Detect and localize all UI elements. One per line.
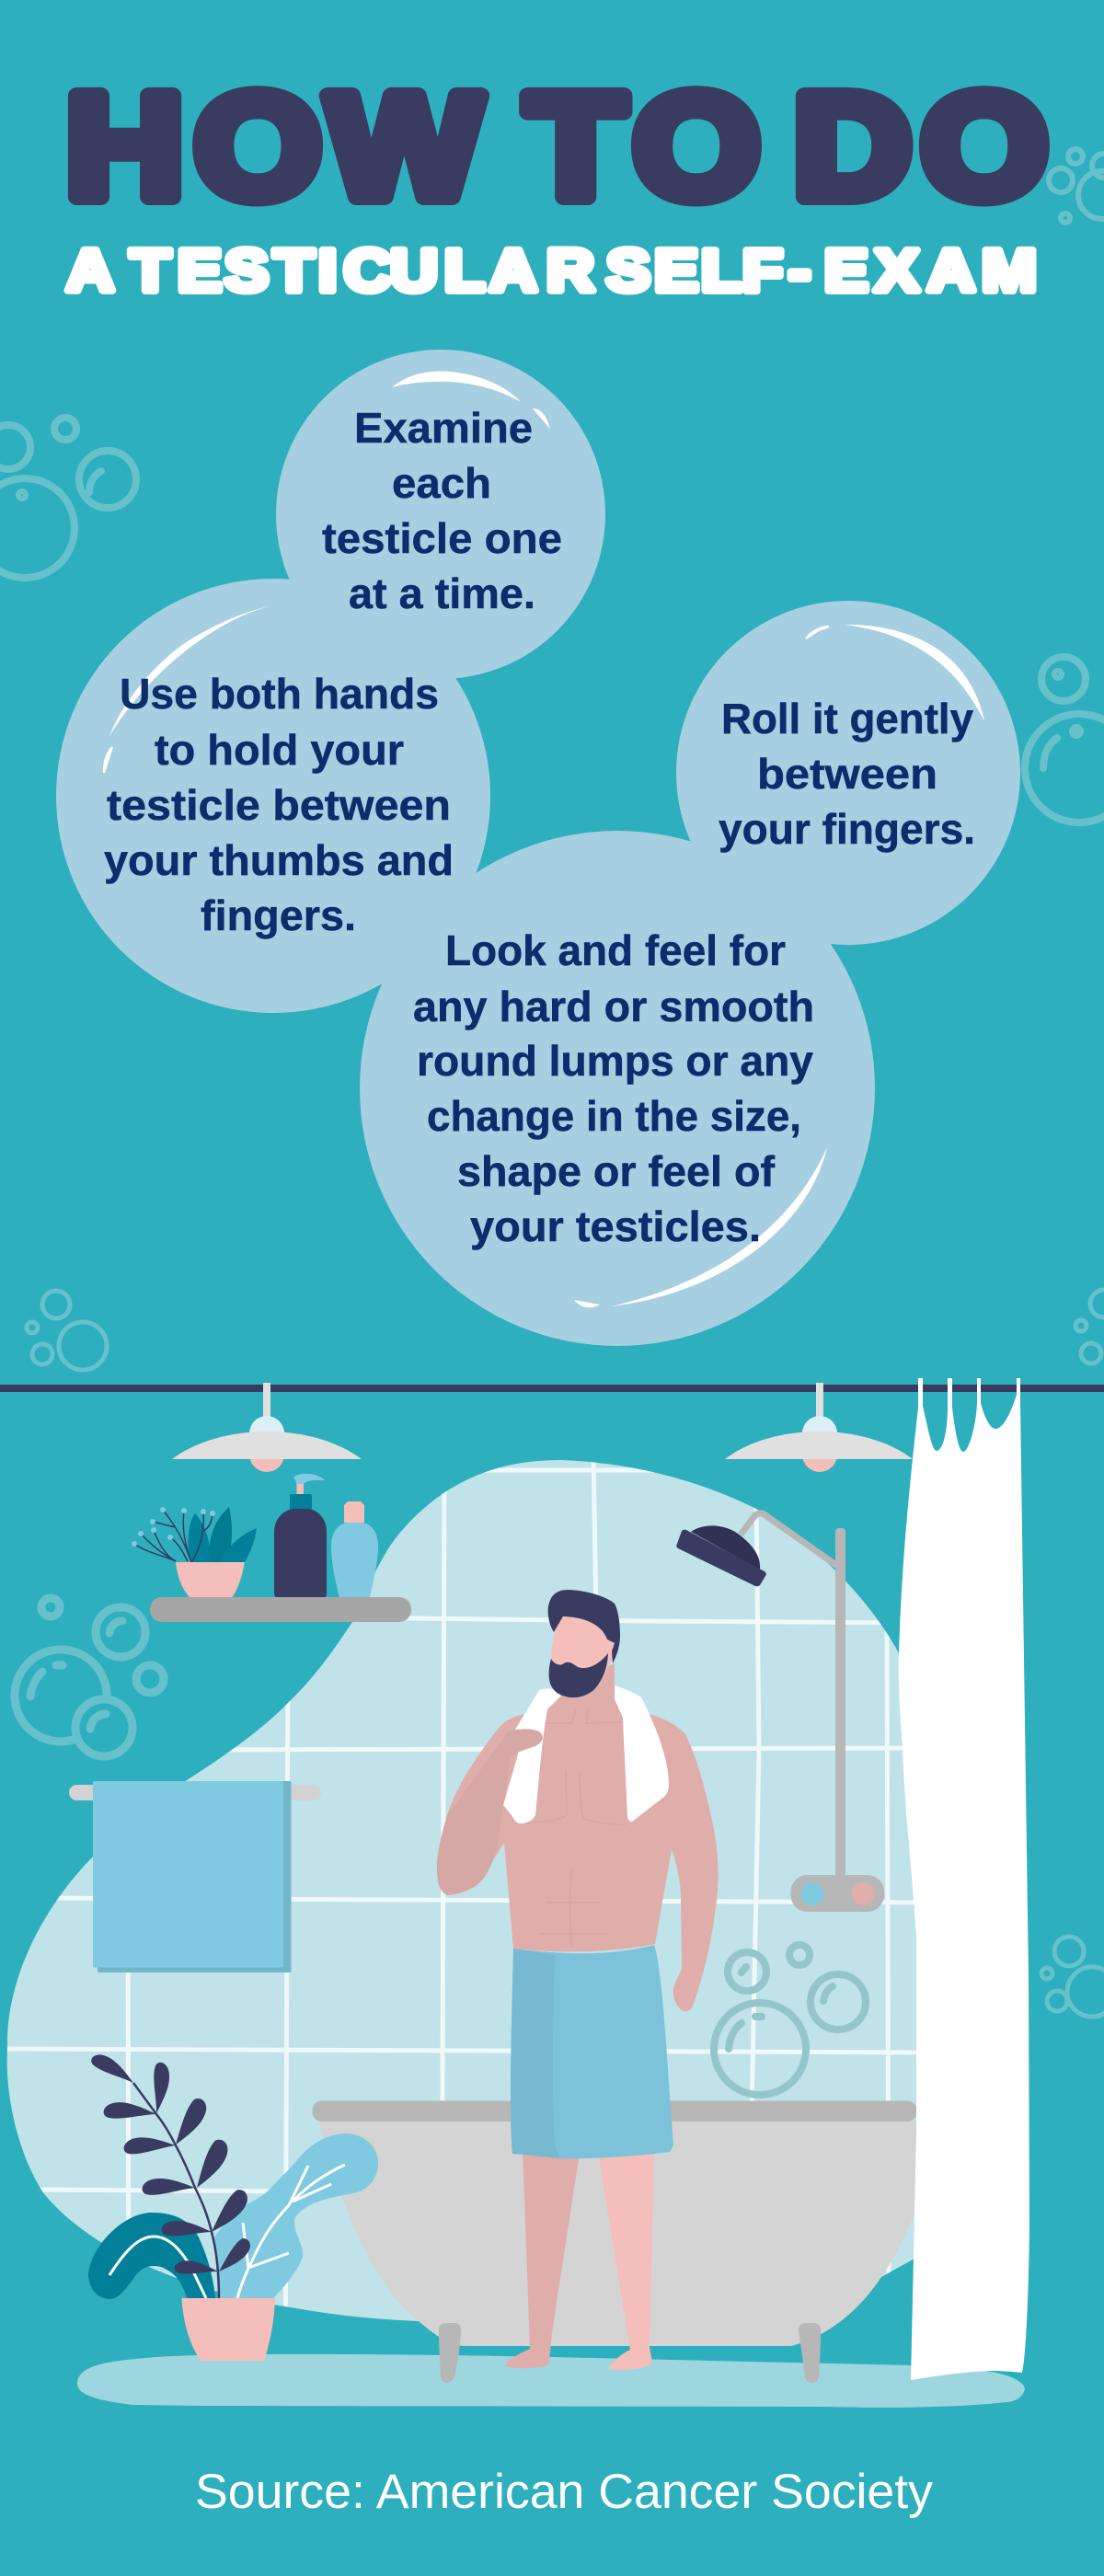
torso and right arm [500, 1663, 719, 2011]
text: look and feel: shape or feel of [457, 1147, 776, 1195]
text: roll it gently: between [757, 750, 937, 798]
face [551, 1616, 615, 1693]
bathtub bubbles [714, 1945, 866, 2095]
left leg [505, 2148, 580, 2368]
decorative bubbles: right [1025, 657, 1104, 822]
shelf board [150, 1597, 411, 1622]
text: use both hands: fingers. [201, 891, 356, 939]
bubble: look and feel [360, 831, 875, 1346]
shower curtain rail [0, 1385, 1104, 1392]
shower curtain [899, 1378, 1029, 2380]
blue bottle [331, 1501, 378, 1598]
bathroom wall tiles [7, 1460, 916, 2321]
sprig leaves [89, 2049, 255, 2281]
text: look and feel: your testicles. [470, 1202, 761, 1250]
decorative bubbles: left [0, 418, 136, 578]
shower fixture [676, 1513, 884, 1912]
left towel strip [503, 1689, 561, 1823]
text: use both hands: Use both hands [120, 670, 439, 718]
bubble: examine each testicle [276, 350, 605, 679]
subtitle: A TESTICULAR SELF-EXAM [0, 238, 1037, 304]
raised upper arm [437, 1727, 529, 1883]
decorative bubbles: top right [1049, 149, 1104, 223]
raised forearm [437, 1736, 511, 1895]
hair [548, 1590, 620, 1663]
blue leaf [214, 2133, 378, 2298]
text: examine each testicle [322, 404, 562, 617]
ceiling lamp right [725, 1383, 913, 1472]
tub foot right [799, 2323, 821, 2383]
plant pot [182, 2298, 275, 2361]
text: use both hands: testicle between [107, 781, 451, 829]
text: examine each testicle: at a time. [349, 569, 535, 617]
right towel strip [615, 1685, 669, 1822]
bubble: roll it gently [676, 601, 1020, 945]
chest and abdomen lines [524, 1709, 626, 1947]
blue leaf veins [237, 2165, 345, 2298]
bubble: use both hands [56, 579, 490, 1013]
beard [549, 1653, 608, 1697]
text: roll it gently: Roll it gently [721, 695, 973, 742]
towel on rail [69, 1781, 321, 1972]
title: how to do: HOW TO DO [0, 63, 1047, 228]
text: use both hands [104, 670, 454, 939]
man with towel [437, 1590, 719, 2370]
waist towel [511, 1945, 673, 2158]
decorative bubbles: bathroom right [1041, 1937, 1104, 2017]
hand on towel [505, 1729, 543, 1757]
pump bottle [274, 1474, 327, 1598]
text: look and feel: change in the size, [427, 1092, 801, 1140]
large potted plant [88, 2049, 378, 2361]
teal leaf vein [109, 2237, 206, 2298]
small plant buds [132, 1507, 215, 1547]
waist towel fold [511, 1949, 559, 2158]
decorative bubbles: mid left [27, 1291, 107, 1370]
text: examine each testicle: testicle one [322, 514, 562, 562]
text: examine each testicle: Examine [354, 404, 533, 452]
text: look and feel: any hard or smooth [413, 983, 814, 1030]
text: use both hands: your thumbs and [104, 836, 454, 884]
text: use both hands: to hold your [155, 726, 404, 774]
small plant pot [176, 1562, 245, 1598]
text: look and feel [413, 926, 814, 1250]
text: examine each testicle: each [392, 459, 491, 507]
shelf with plant and bottles [132, 1474, 411, 1622]
tub foot left [439, 2323, 461, 2383]
text: roll it gently [719, 695, 975, 853]
sprig stem [133, 2083, 219, 2298]
teal leaf [88, 2213, 215, 2299]
text: roll it gently: your fingers. [719, 805, 975, 853]
decorative bubbles: bathroom left [15, 1598, 164, 1756]
text: look and feel: round lumps or any [417, 1037, 813, 1085]
bathtub [313, 2101, 917, 2383]
text: look and feel: Look and feel for [445, 926, 786, 974]
decorative bubbles: mid right [1075, 1290, 1104, 1363]
small plant leaves [189, 1507, 257, 1562]
source credit: Source: American Cancer Society [195, 2465, 933, 2519]
small plant twigs [134, 1510, 213, 1562]
ceiling lamp left [172, 1383, 362, 1472]
right leg [598, 2148, 654, 2370]
floor mat [77, 2354, 1025, 2408]
